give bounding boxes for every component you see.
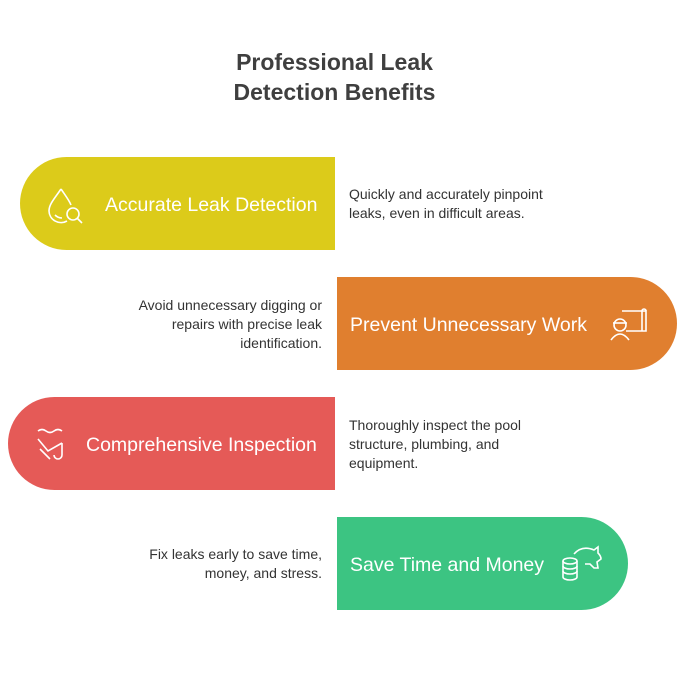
icon: coins and piggy bank: [562, 546, 602, 581]
text: prevent: [138, 297, 322, 351]
text: prevent: identification.: [240, 335, 322, 351]
text: accurate: leaks, even in difficult areas.: [349, 205, 525, 221]
text: save: Fix leaks early to save time,: [149, 546, 322, 562]
title: [234, 49, 435, 105]
text: comprehensive: Thoroughly inspect the pool: [349, 417, 521, 433]
panel: accurate leak detection: [20, 157, 335, 250]
label: Save Time and Money: [350, 554, 544, 576]
label: Prevent Unnecessary Work: [350, 314, 587, 336]
panel: save time and money: [337, 517, 628, 610]
icon: worker with blueprint: [610, 308, 647, 340]
text: save: [149, 546, 322, 581]
text: accurate: Quickly and accurately pinpoint: [349, 186, 543, 202]
text: accurate: [349, 186, 543, 221]
title: Detection Benefits: [234, 79, 435, 105]
icon: drop with magnifier: [48, 188, 82, 224]
text: prevent: Avoid unnecessary digging or: [139, 297, 322, 313]
text: prevent: repairs with precise leak: [172, 316, 322, 332]
icon: pool ladder: [38, 428, 63, 460]
text: comprehensive: structure, plumbing, and: [349, 436, 499, 452]
title: Professional Leak: [236, 49, 433, 75]
text: save: money, and stress.: [205, 565, 322, 581]
panel: prevent unnecessary work: [337, 277, 677, 370]
label: Accurate Leak Detection: [105, 194, 317, 216]
panel: comprehensive inspection: [8, 397, 335, 490]
label: Comprehensive Inspection: [86, 434, 317, 456]
text: comprehensive: equipment.: [349, 455, 418, 471]
text: comprehensive: [349, 417, 521, 471]
